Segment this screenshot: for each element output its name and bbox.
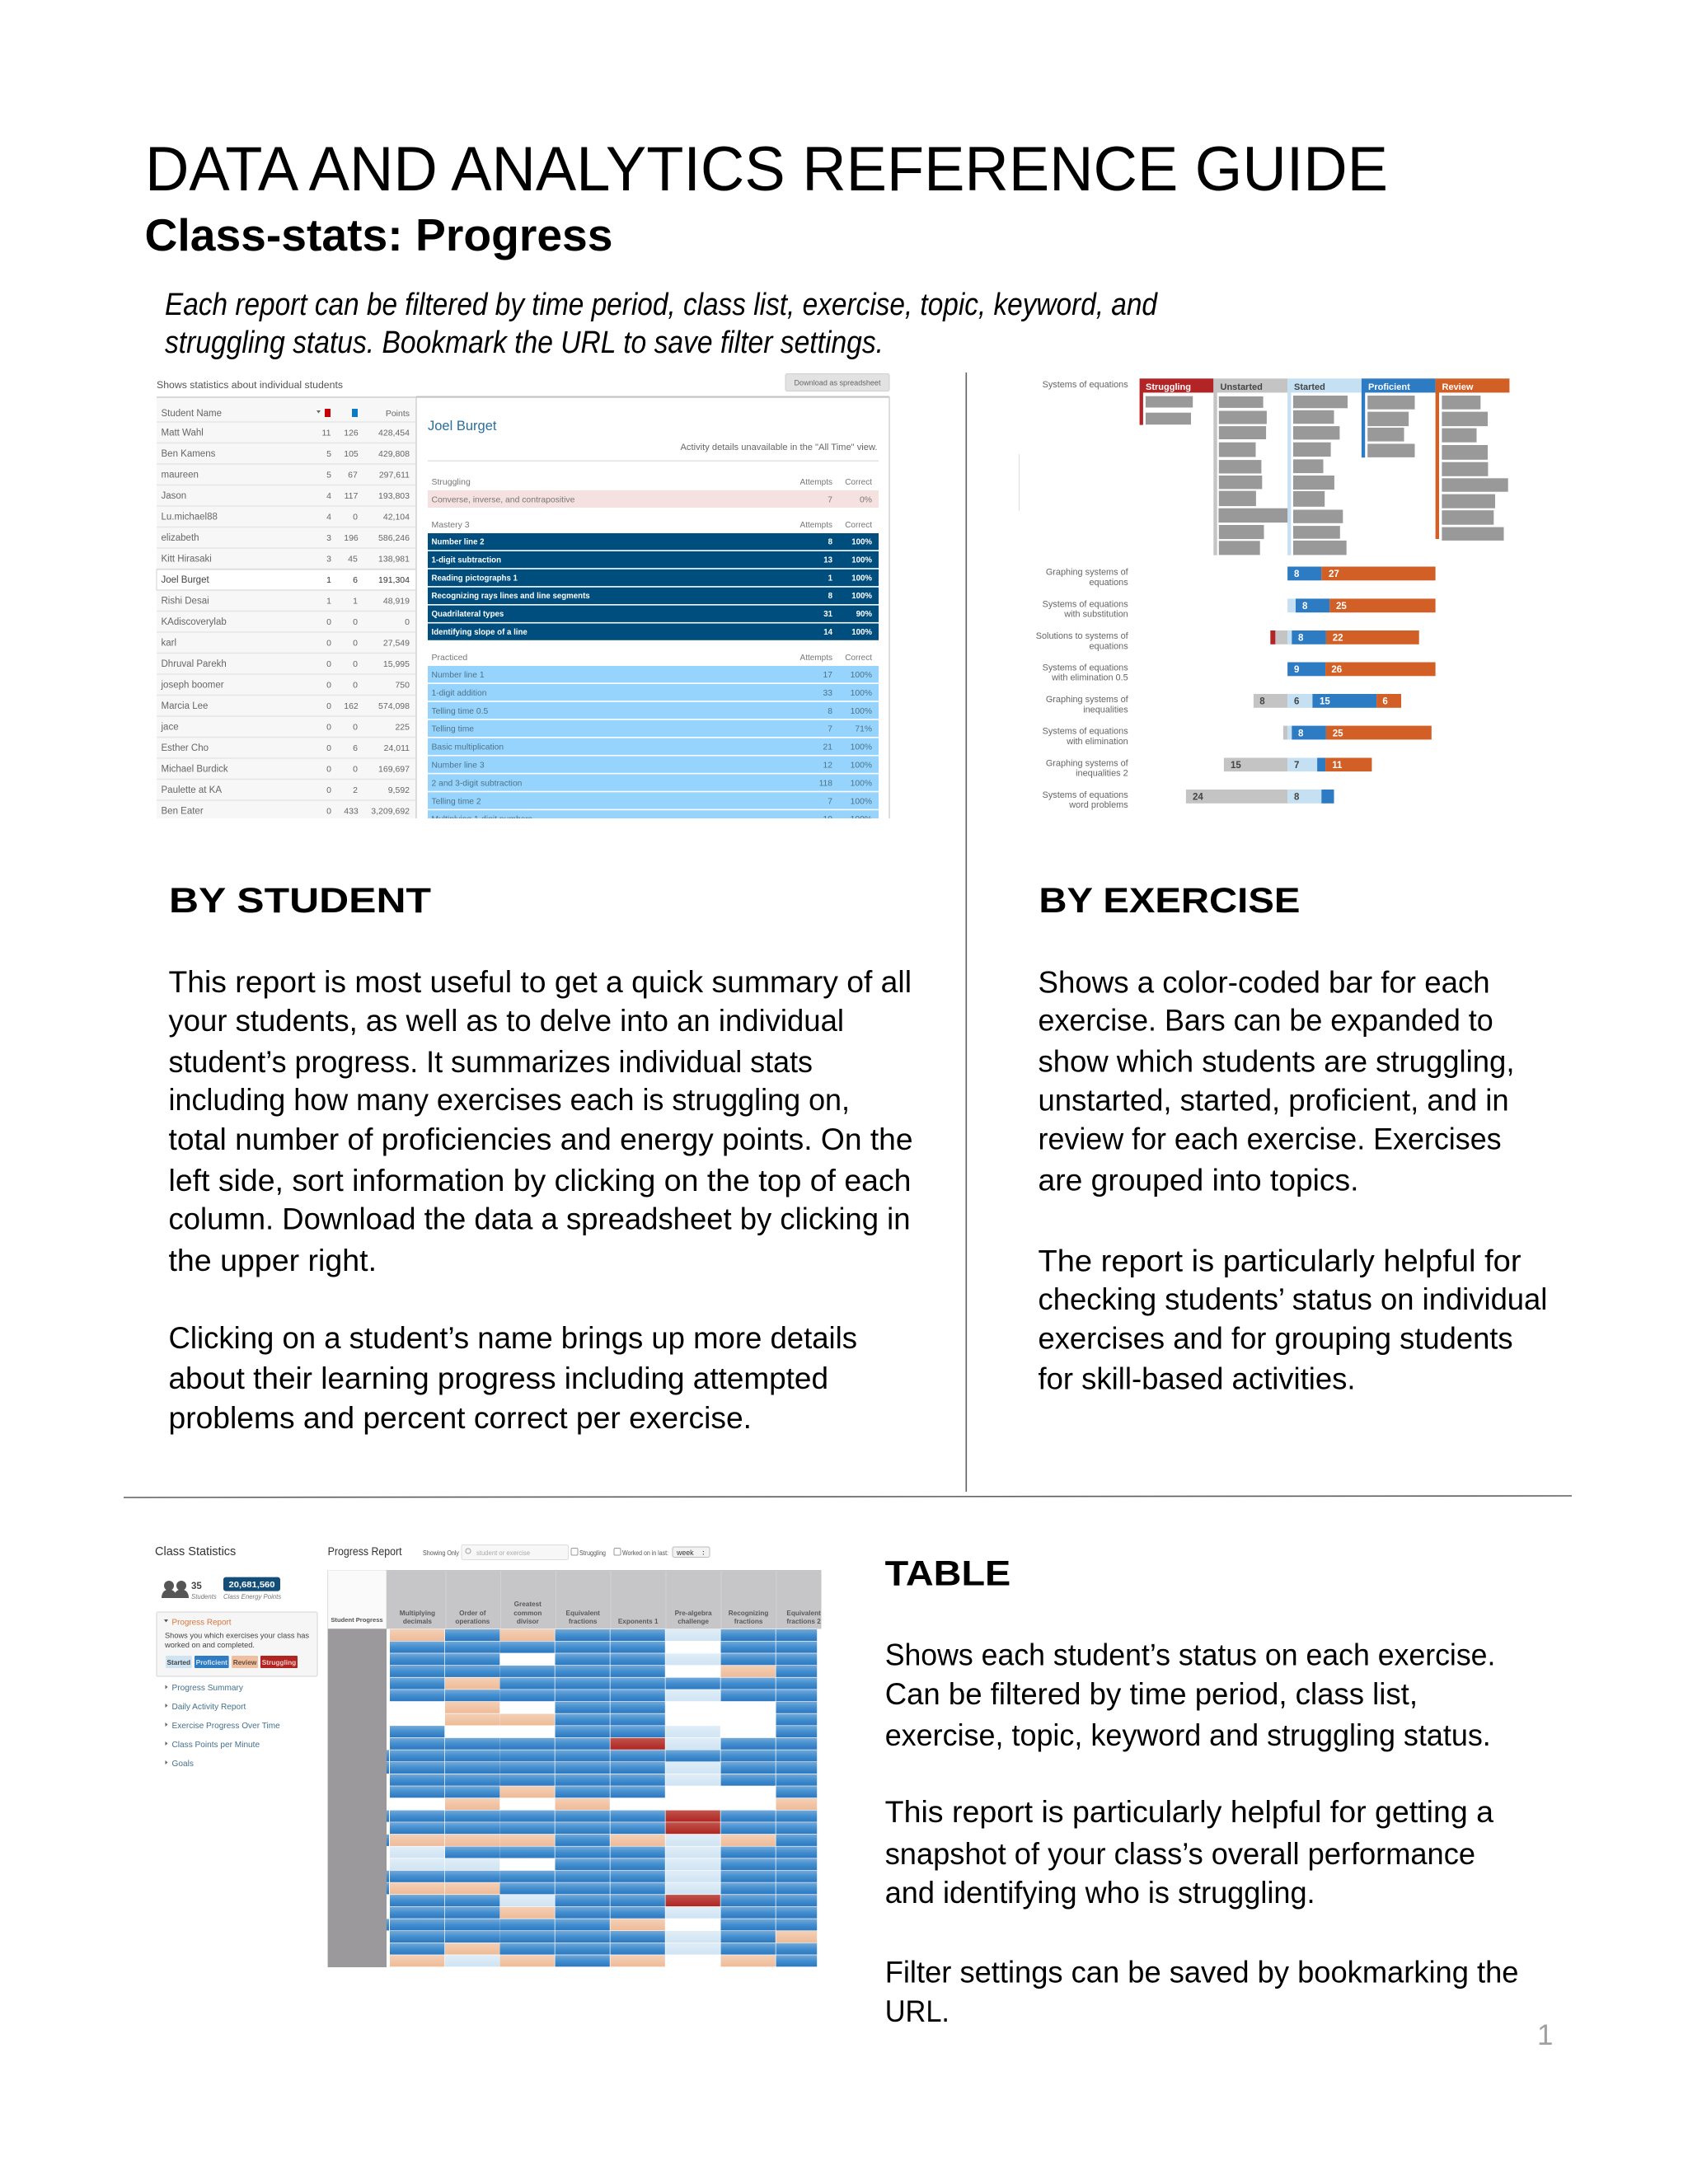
stacked bars: 27 xyxy=(1329,569,1339,579)
mastery list: Mastery 3 xyxy=(432,520,470,530)
practiced list: Number line 3 xyxy=(432,762,485,770)
struggling list: 7 xyxy=(828,496,832,504)
heading: table: TABLE xyxy=(885,1554,1010,1594)
mastery list: 8 xyxy=(828,592,833,601)
student table: 24,011 xyxy=(384,743,410,753)
stacked bars: 6 xyxy=(1382,697,1388,707)
filter bar: student or exercise xyxy=(476,1549,530,1557)
mastery list: 1-digit subtraction xyxy=(432,555,501,565)
page number: 1 xyxy=(1537,2019,1553,2051)
text: table description: This report is particularly helpful for getting a xyxy=(885,1795,1493,1829)
table header: Exponents 1 xyxy=(618,1618,659,1625)
text: table description: exercise, topic, keyword and struggling status. xyxy=(885,1718,1491,1752)
filter bar: week xyxy=(676,1549,694,1557)
practiced list: 100% xyxy=(851,762,872,770)
subtitle: Class-stats: Progress xyxy=(145,209,613,260)
text: by exercise description: for skill-based activities. xyxy=(1039,1361,1355,1395)
text: by student description: problems and percent correct per exercise. xyxy=(168,1401,752,1435)
sidebar: class statistics: Students xyxy=(191,1593,217,1601)
filter bar: Progress Report xyxy=(328,1545,402,1558)
mastery list: Correct xyxy=(845,521,872,530)
student table: 0 xyxy=(353,681,358,691)
table header: common xyxy=(513,1610,542,1617)
exercise labels: word problems xyxy=(1068,800,1128,810)
table header: divisor xyxy=(517,1618,540,1625)
student detail panel: Activity details unavailable in the "All Time" view. xyxy=(681,443,877,452)
mastery list: 100% xyxy=(851,555,872,565)
stacked bars: 8 xyxy=(1302,602,1308,612)
mastery list: 90% xyxy=(856,610,872,619)
student table: Kitt Hirasaki xyxy=(162,555,212,565)
exercise labels: inequalities xyxy=(1083,705,1128,715)
text: by exercise description: Shows a color-coded bar for each xyxy=(1039,965,1490,999)
exercise labels: inequalities 2 xyxy=(1076,769,1128,779)
practiced list: 71% xyxy=(855,725,872,734)
text: by student description: Clicking on a student’s name brings up more details xyxy=(168,1321,857,1355)
table header: challenge xyxy=(678,1618,709,1625)
text: by student description xyxy=(168,965,913,1435)
student table: Ben Eater xyxy=(162,807,204,817)
status columns headers: Unstarted xyxy=(1220,382,1263,392)
student table: Matt Wahl xyxy=(162,429,204,438)
practiced list: Telling time 0.5 xyxy=(432,707,488,716)
student table: 0 xyxy=(326,639,331,649)
student detail panel xyxy=(416,396,889,827)
student table: 0 xyxy=(326,743,331,753)
student table: jace xyxy=(160,723,179,733)
text: table description: Shows each student’s status on each exercise. xyxy=(885,1638,1495,1671)
practiced list: Number line 1 xyxy=(432,671,485,680)
struggling list: Struggling xyxy=(432,477,471,487)
heading: by exercise: BY EXERCISE xyxy=(1039,881,1300,921)
sidebar: class statistics xyxy=(155,1545,317,1769)
exercise labels: Systems of equations xyxy=(1043,599,1128,609)
mastery list: 13 xyxy=(823,555,833,565)
table header: Recognizing xyxy=(729,1610,768,1617)
report card: Started xyxy=(167,1658,190,1666)
table header: Greatest xyxy=(514,1601,542,1608)
status columns headers: Proficient xyxy=(1368,382,1410,392)
sidebar: class statistics: 20,681,560 xyxy=(229,1580,275,1590)
sidebar links: Daily Activity Report xyxy=(171,1703,246,1712)
student table: 0 xyxy=(353,513,358,523)
table header: Equivalent xyxy=(565,1610,600,1617)
text: by student description: This report is most useful to get a quick summary of all xyxy=(168,965,912,999)
student table: 6 xyxy=(353,575,358,585)
exercise labels: Systems of equations xyxy=(1043,790,1128,800)
sidebar: class statistics: 35 xyxy=(191,1582,202,1591)
exercise labels: with elimination xyxy=(1066,737,1128,747)
download button xyxy=(785,374,889,391)
mastery list: 100% xyxy=(851,628,872,637)
mastery list: 14 xyxy=(823,628,833,637)
stacked bars: 24 xyxy=(1193,793,1203,803)
student table: KAdiscoverylab xyxy=(162,617,227,627)
practiced list: Correct xyxy=(845,654,872,663)
intro text: struggling status. Bookmark the URL to save filter settings. xyxy=(165,326,884,360)
student table: 27,549 xyxy=(383,639,410,649)
sidebar links: Exercise Progress Over Time xyxy=(171,1722,280,1731)
sidebar links: Class Points per Minute xyxy=(171,1741,260,1750)
student table: 1 xyxy=(326,597,331,607)
student table: 138,981 xyxy=(378,555,410,565)
practiced list xyxy=(428,653,879,827)
student table: 297,611 xyxy=(379,471,410,480)
exercise labels: Graphing systems of xyxy=(1046,695,1129,705)
student table: joseph boomer xyxy=(160,681,224,691)
horizontal divider xyxy=(124,1496,1572,1497)
text: table description: Can be filtered by time period, class list, xyxy=(885,1677,1418,1711)
mastery list: 1 xyxy=(828,574,833,583)
stacked bars: 15 xyxy=(1231,761,1241,771)
exercise labels: Systems of equations xyxy=(1043,663,1128,673)
student table: 0 xyxy=(353,639,358,649)
student table: 0 xyxy=(353,617,358,627)
table header: operations xyxy=(455,1618,490,1625)
column rails xyxy=(1140,392,1439,555)
practiced list: 100% xyxy=(851,797,872,806)
student table: Michael Burdick xyxy=(162,765,228,775)
filter bar: Showing Only xyxy=(423,1549,459,1557)
mastery list: 100% xyxy=(851,537,872,547)
status columns headers: Started xyxy=(1294,382,1325,392)
student table: 750 xyxy=(395,681,410,691)
student table: 11 xyxy=(322,429,331,438)
practiced list: 118 xyxy=(819,779,832,788)
report card: Shows you which exercises your class has xyxy=(165,1632,309,1640)
practiced list: Telling time xyxy=(432,725,474,734)
mastery list: 8 xyxy=(828,537,833,547)
filter bar: Worked on in last: xyxy=(622,1549,668,1557)
student table: 0 xyxy=(326,617,331,627)
text: by student description: left side, sort information by clicking on the top of each xyxy=(168,1164,912,1197)
practiced list: Multiplying 1-digit numbers xyxy=(432,815,532,824)
student table: Jason xyxy=(162,491,186,501)
exercise labels: Graphing systems of xyxy=(1046,758,1129,768)
practiced list: Practiced xyxy=(432,653,467,663)
title: DATA AND ANALYTICS REFERENCE GUIDE xyxy=(145,134,1388,204)
stacked bars: 8 xyxy=(1259,697,1265,707)
student table: Paulette at KA xyxy=(162,785,222,795)
exercise labels: Solutions to systems of xyxy=(1036,631,1129,641)
student table: 48,919 xyxy=(383,597,410,607)
student table: Marcia Lee xyxy=(162,701,208,711)
table header: Student Progress xyxy=(331,1616,383,1624)
text: table description: snapshot of your class’s overall performance xyxy=(885,1837,1475,1871)
student table: 0 xyxy=(353,659,358,669)
mastery list: 100% xyxy=(851,574,872,583)
heading: by student: BY STUDENT xyxy=(169,881,431,921)
exercise labels: equations xyxy=(1089,641,1128,651)
student table: 126 xyxy=(344,429,359,438)
mastery list xyxy=(428,520,879,640)
student table: 0 xyxy=(326,723,331,733)
stacked bars: 9 xyxy=(1294,665,1299,675)
table header: Order of xyxy=(459,1610,486,1617)
stacked bars: 22 xyxy=(1333,634,1343,644)
sidebar links: Progress Summary xyxy=(171,1684,244,1693)
panel: table report screenshot xyxy=(155,1544,821,1967)
student table: Ben Kamens xyxy=(162,449,216,459)
student table: 3 xyxy=(326,533,331,543)
filter bar xyxy=(328,1544,710,1559)
practiced list: 17 xyxy=(823,671,832,680)
student table: karl xyxy=(162,639,176,649)
text: table description xyxy=(885,1638,1518,2028)
exercise labels: with elimination 0.5 xyxy=(1051,673,1128,683)
stacked bars: 6 xyxy=(1294,697,1299,707)
sidebar links: Goals xyxy=(171,1760,194,1769)
student table: 3 xyxy=(326,555,331,565)
text: by exercise description: are grouped into topics. xyxy=(1039,1164,1358,1197)
student table: 191,304 xyxy=(378,575,410,585)
student table: 0 xyxy=(326,785,331,795)
student table: 0 xyxy=(326,659,331,669)
student table: 9,592 xyxy=(388,785,410,795)
stacked bars: 25 xyxy=(1336,602,1347,612)
stacked bars: 7 xyxy=(1294,761,1299,771)
practiced list: 12 xyxy=(823,762,832,770)
practiced list: 100% xyxy=(851,743,872,752)
text: by student description: your students, as well as to delve into an individual xyxy=(168,1004,844,1038)
student table: 433 xyxy=(344,807,359,817)
progress grid xyxy=(387,1629,817,1966)
mastery list: Attempts xyxy=(800,521,832,530)
table header: decimals xyxy=(403,1618,432,1625)
student table: 0 xyxy=(353,765,358,775)
student table: 2 xyxy=(353,785,358,795)
text: by student description: including how many exercises each is struggling on, xyxy=(168,1083,850,1117)
student table: 169,697 xyxy=(378,765,410,775)
status columns headers xyxy=(1140,378,1509,392)
intro text xyxy=(165,288,1159,360)
download button: Download as spreadsheet xyxy=(795,379,881,387)
mastery list: Recognizing rays lines and line segments xyxy=(432,592,590,601)
practiced list: 100% xyxy=(851,779,872,788)
practiced list: 100% xyxy=(851,815,872,824)
struggling list: 0% xyxy=(860,496,872,504)
table header: Multiplying xyxy=(400,1610,435,1617)
practiced list: 100% xyxy=(851,671,872,680)
mastery list: 100% xyxy=(851,592,872,601)
sidebar links xyxy=(165,1684,280,1769)
text: by exercise description: The report is particularly helpful for xyxy=(1039,1244,1522,1278)
mastery list: 31 xyxy=(823,610,833,619)
struggling list: Converse, inverse, and contrapositive xyxy=(432,496,575,504)
student table: 0 xyxy=(326,765,331,775)
stacked bars: 8 xyxy=(1298,634,1304,644)
student table: 5 xyxy=(326,471,331,480)
text: by student description: total number of proficiencies and energy points. On the xyxy=(168,1122,913,1156)
practiced list: 100% xyxy=(851,707,872,716)
text: table description: URL. xyxy=(885,1994,950,2028)
report card: Progress Report xyxy=(171,1617,232,1627)
report card: worked on and completed. xyxy=(164,1641,255,1649)
table header: fractions 2 xyxy=(786,1618,821,1625)
student table: 1 xyxy=(326,575,331,585)
stacked bars: 15 xyxy=(1320,697,1330,707)
student table: 105 xyxy=(344,449,359,459)
text: by exercise description: exercises and for grouping students xyxy=(1039,1321,1513,1355)
vertical divider xyxy=(966,373,967,1492)
panel: by exercise chart xyxy=(1019,378,1509,810)
text: by exercise description: show which students are struggling, xyxy=(1039,1045,1515,1079)
practiced list: 7 xyxy=(828,725,832,734)
faint artifact line xyxy=(1019,454,1020,511)
exercise labels: equations xyxy=(1089,578,1128,588)
practiced list: 8 xyxy=(828,707,832,716)
student table: 4 xyxy=(326,513,331,523)
stacked bars: 25 xyxy=(1333,729,1343,738)
stacked bars: 8 xyxy=(1294,569,1300,579)
student table: Joel Burget xyxy=(162,575,209,585)
student table: 15,995 xyxy=(383,659,410,669)
status columns headers: Review xyxy=(1442,382,1474,392)
status columns headers: Struggling xyxy=(1146,382,1191,392)
icon: students xyxy=(162,1581,189,1598)
student table: 193,803 xyxy=(378,491,410,501)
text: by exercise description xyxy=(1039,965,1547,1395)
student table: 0 xyxy=(326,681,331,691)
table header: Pre-algebra xyxy=(675,1610,712,1617)
filter bar: : xyxy=(702,1548,705,1556)
text: table description: Filter settings can be saved by bookmarking the xyxy=(885,1956,1518,1990)
practiced list: Basic multiplication xyxy=(432,743,504,752)
practiced list: 10 xyxy=(823,815,832,824)
text: table description: and identifying who is struggling. xyxy=(885,1876,1315,1910)
student table: 1 xyxy=(353,597,358,607)
student table: 6 xyxy=(353,743,358,753)
practiced list: 33 xyxy=(823,689,832,698)
student table: 5 xyxy=(326,449,331,459)
stacked bars: 8 xyxy=(1298,729,1304,738)
text: by student description: column. Download the data a spreadsheet by clicking in xyxy=(168,1202,910,1236)
exercise labels: Graphing systems of xyxy=(1046,568,1129,578)
practiced list: 21 xyxy=(823,743,832,752)
student table: 117 xyxy=(345,491,359,501)
student table: Student Name xyxy=(162,409,222,419)
table header: Equivalent xyxy=(786,1610,821,1617)
student table: 0 xyxy=(405,617,410,627)
student table: 429,808 xyxy=(378,449,410,459)
student table: 586,246 xyxy=(378,533,410,543)
practiced list: 7 xyxy=(828,797,832,806)
student table: 574,098 xyxy=(378,701,410,711)
student table: Points xyxy=(386,409,410,419)
student table: 225 xyxy=(395,723,410,733)
sidebar: class statistics: Class Energy Points xyxy=(223,1593,281,1601)
text: by student description: about their learning progress including attempted xyxy=(168,1361,828,1395)
student table: 428,454 xyxy=(378,429,410,438)
report card: Proficient xyxy=(196,1658,227,1666)
table header: fractions xyxy=(734,1618,763,1625)
struggling list: Correct xyxy=(845,478,872,487)
practiced list: 2 and 3-digit subtraction xyxy=(432,779,523,788)
practiced list: 1-digit addition xyxy=(432,689,487,698)
mastery list: Quadrilateral types xyxy=(432,610,504,619)
mastery list: Number line 2 xyxy=(432,537,485,547)
text: by student description: student’s progress. It summarizes individual stats xyxy=(168,1045,813,1079)
exercise labels: with substitution xyxy=(1063,610,1128,620)
exercise labels xyxy=(1036,568,1129,810)
struggling list: Attempts xyxy=(800,478,832,487)
mastery list: Identifying slope of a line xyxy=(432,628,528,637)
student table: 0 xyxy=(326,701,331,711)
student table: 67 xyxy=(348,471,358,480)
exercise labels: Systems of equations xyxy=(1043,726,1128,736)
student table: Esther Cho xyxy=(162,743,209,753)
student table: 42,104 xyxy=(383,513,410,523)
energy points badge xyxy=(223,1577,280,1591)
student table: 3,209,692 xyxy=(371,807,410,817)
student detail panel: Joel Burget xyxy=(428,419,497,434)
stacked bars: 26 xyxy=(1331,665,1342,675)
student table: 0 xyxy=(326,807,331,817)
text: by exercise description: unstarted, started, proficient, and in xyxy=(1039,1084,1509,1118)
student table: elizabeth xyxy=(162,533,199,543)
practiced list: Attempts xyxy=(800,654,832,663)
stacked bars: 11 xyxy=(1332,761,1343,771)
student table: Dhruval Parekh xyxy=(162,659,227,669)
expanded topic label: Systems of equations xyxy=(1043,380,1128,390)
filter bar: Struggling xyxy=(579,1549,606,1557)
student table: maureen xyxy=(162,471,199,480)
practiced list: Telling time 2 xyxy=(432,797,481,806)
report card: Review xyxy=(233,1658,257,1666)
table header: fractions xyxy=(569,1618,598,1625)
panel: by student screenshot xyxy=(157,374,889,827)
student table: 0 xyxy=(353,723,358,733)
mastery list: Reading pictographs 1 xyxy=(432,574,518,583)
student table: 196 xyxy=(344,533,359,543)
text: by exercise description: exercise. Bars can be expanded to xyxy=(1039,1004,1493,1038)
student table xyxy=(157,396,416,826)
sidebar: class statistics: Class Statistics xyxy=(155,1545,236,1558)
report card xyxy=(157,1612,317,1676)
text: by exercise description: checking students’ status on individual xyxy=(1039,1282,1547,1316)
intro text: Each report can be filtered by time period, class list, exercise, topic, keyword, and xyxy=(165,288,1159,322)
practiced list: 100% xyxy=(851,689,872,698)
text: by student description: the upper right. xyxy=(168,1244,377,1277)
stacked bars xyxy=(1186,567,1436,804)
struggling list xyxy=(428,477,879,508)
text: by exercise description: review for each exercise. Exercises xyxy=(1039,1122,1502,1156)
student progress column (redacted) xyxy=(328,1629,387,1967)
student table: 45 xyxy=(348,555,358,565)
student table: Lu.michael88 xyxy=(162,513,218,523)
student name bars (redacted) xyxy=(1146,396,1508,555)
caption: Shows statistics about individual students xyxy=(157,381,343,391)
table header xyxy=(328,1570,822,1629)
stacked bars: 8 xyxy=(1294,793,1300,803)
student table: 162 xyxy=(344,701,359,711)
student table: 4 xyxy=(326,491,331,501)
student table: Rishi Desai xyxy=(162,597,209,607)
report card: Struggling xyxy=(262,1658,296,1666)
